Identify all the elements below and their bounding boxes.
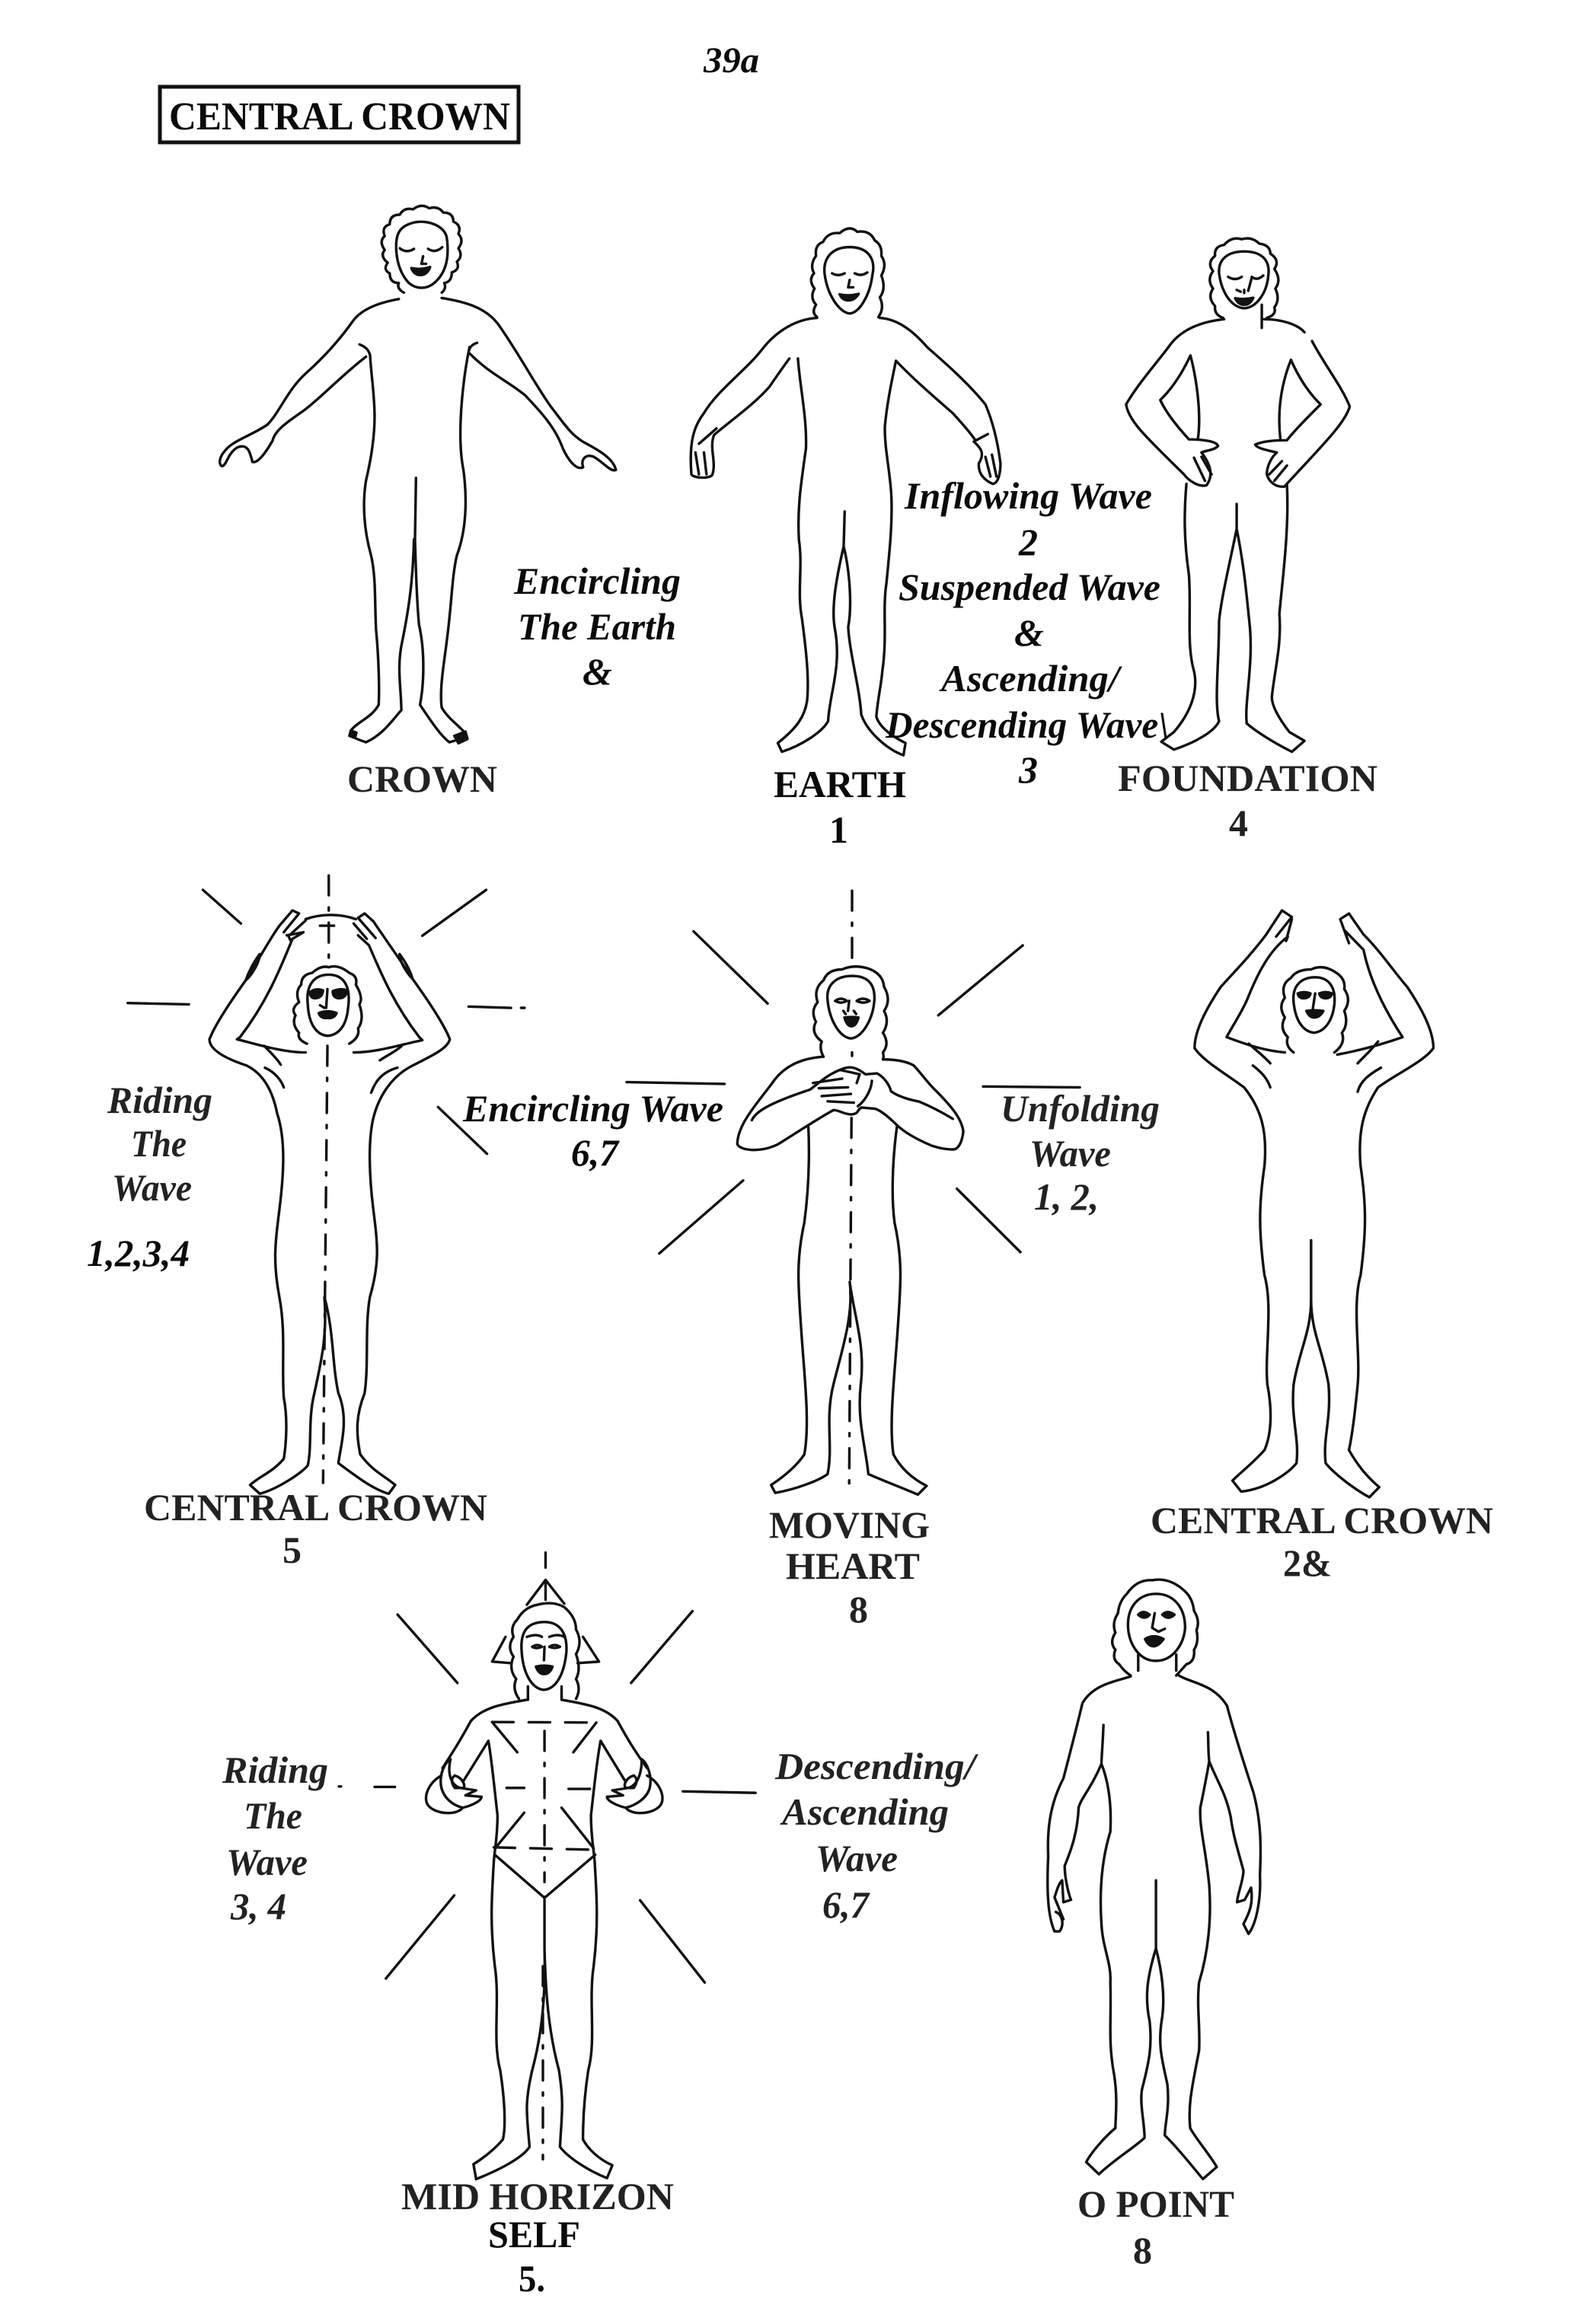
label: wave sequence: 2 [1018,521,1038,563]
label: foundation 4: 4 [1229,802,1248,844]
label: moving heart 8 [769,1503,930,1631]
label: wave sequence: 3 [1018,748,1038,791]
label: unfolding wave 1,2: Wave [1029,1132,1111,1175]
label: riding the wave 3,4: Wave [226,1841,308,1883]
label: mid horizon self 5: SELF [488,2213,580,2255]
label: central crown 2 and [1151,1499,1493,1584]
label: central crown 5: 5 [282,1529,302,1571]
label: encircling the earth: The Earth [518,605,676,648]
label: wave sequence: Ascending/ [939,657,1122,700]
label: encircling wave 6,7: 6,7 [571,1131,620,1174]
rays and energy lines: mid horizon self [339,1553,755,2160]
head: foundation figure [1210,238,1278,318]
label: wave sequence [885,474,1169,791]
label: descending ascending wave 6,7: Wave [816,1837,898,1879]
label: riding the wave 3,4: 3, 4 [230,1885,286,1927]
label: o point 8: 8 [1133,2229,1152,2271]
label: mid horizon self 5: 5. [519,2257,545,2300]
body outline: crown figure [220,298,616,742]
label: encircling wave 6,7: Encircling Wave [462,1087,723,1130]
head: earth figure [811,228,884,317]
rays: central crown 5 [128,875,525,1483]
label: wave sequence: Inflowing Wave [904,474,1152,517]
label: earth 1 [774,763,906,851]
figure: o point [1048,1580,1260,2179]
label: riding the wave 1,2,3,4: Riding [107,1079,212,1121]
figure: crown [220,206,616,743]
label: unfolding wave 1,2 [1001,1087,1160,1218]
body and arms: central crown 2 and [1195,910,1433,1497]
label: encircling the earth: & [583,650,612,693]
label: central crown 2 and: CENTRAL CROWN [1151,1499,1493,1541]
label: mid horizon self 5 [401,2175,674,2300]
head: mid horizon self [510,1603,579,1700]
body and arms: central crown 5 [209,910,450,1494]
toes: crown figure [350,731,468,743]
label: riding the wave 1,2,3,4: Wave [112,1166,192,1209]
body outline: earth figure [691,318,1001,755]
rays: moving heart [627,891,1080,1490]
label: riding the wave 3,4 [222,1749,328,1927]
label: unfolding wave 1,2: 1, 2, [1034,1175,1099,1218]
label: riding the wave 3,4: The [244,1794,302,1837]
body and arms: o point [1048,1675,1260,2179]
body, arms and clasped hands: moving heart [737,1057,963,1494]
label: riding the wave 3,4: Riding [222,1749,328,1791]
label: encircling wave 6,7 [462,1087,723,1174]
label: moving heart 8: HEART [786,1545,920,1587]
label: moving heart 8: 8 [849,1588,868,1631]
label: foundation 4: FOUNDATION [1118,757,1377,799]
label: central crown 5 [144,1486,487,1571]
figure: foundation [1126,238,1350,752]
label: earth 1: 1 [829,808,848,851]
body outline: foundation figure [1126,304,1350,752]
label: descending ascending wave 6,7: 6,7 [822,1883,870,1926]
label: wave sequence: Suspended Wave [899,566,1160,608]
figure: moving heart [627,891,1080,1494]
figure: mid horizon self [339,1553,755,2179]
head: central crown 5 [294,967,362,1044]
label: encircling the earth [513,559,681,693]
label: encircling the earth: Encircling [513,559,681,602]
page number: 39a [703,40,759,81]
label: riding the wave 1,2,3,4 [87,1079,212,1274]
head: crown figure [381,206,461,292]
figure: central crown 5 [128,875,525,1494]
label: crown: CROWN [347,757,497,800]
label: unfolding wave 1,2: Unfolding [1001,1087,1160,1130]
label: o point 8 [1077,2182,1234,2271]
label: moving heart 8: MOVING [769,1503,930,1546]
label: wave sequence: & [1014,611,1044,654]
title box: central crown: CENTRAL CROWN [169,95,510,139]
label: descending ascending wave 6,7: Descending/ [774,1745,978,1787]
figure: earth [691,228,1001,755]
label: riding the wave 1,2,3,4: 1,2,3,4 [87,1232,190,1274]
label: central crown 2 and: 2& [1283,1541,1332,1584]
label: riding the wave 1,2,3,4: The [131,1122,187,1165]
head: central crown 2 and [1282,968,1348,1053]
label: o point 8: O POINT [1077,2182,1234,2225]
label: mid horizon self 5: MID HORIZON [401,2175,674,2217]
label: wave sequence: Descending Wave\ [885,703,1169,746]
label: central crown 5: CENTRAL CROWN [144,1486,487,1529]
label: descending ascending wave 6,7: Ascending [780,1790,949,1833]
label: foundation 4 [1118,757,1377,844]
head: moving heart [813,967,888,1060]
label: earth 1: EARTH [774,763,906,805]
label: descending ascending wave 6,7 [774,1745,978,1926]
body and arms: mid horizon self [426,1700,662,2179]
head: o point [1112,1580,1198,1675]
figure: central crown 2 and [1195,910,1433,1497]
